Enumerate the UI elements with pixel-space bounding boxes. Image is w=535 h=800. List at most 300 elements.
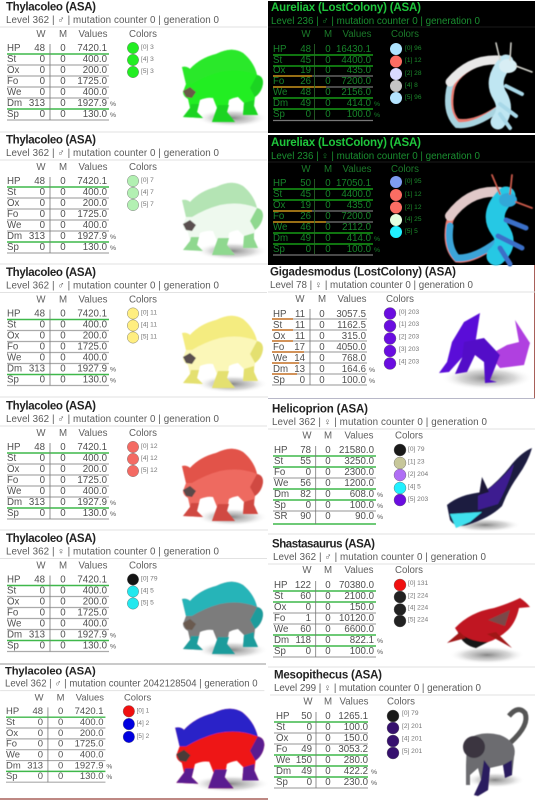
stat table: 0 [40,65,46,76]
color swatches [127,560,158,609]
stat table: 3057.5 [336,309,366,320]
stat table: 0 [60,308,66,320]
stat table: 0 [319,309,325,320]
stat table: 48 [300,87,311,98]
stat table: W [36,294,46,306]
stat table: 0 [60,54,66,65]
stat table: 1725.0 [77,76,108,87]
stat table: 0 [307,722,313,733]
stat table: 1927.9 [77,231,107,242]
stat table: 0 [60,486,66,497]
stat table: 0 [40,475,46,486]
stat table: 435.0 [347,200,372,211]
stat table: 0 [325,178,331,189]
stat table: 0 [300,375,306,386]
panel: Helicoprion [268,404,535,532]
stat table: Values [343,29,372,40]
stat table: 1725.0 [77,209,108,220]
stat table: 19 [300,200,311,211]
stat table: 0 [325,591,331,602]
panel: Thylacoleo red [0,401,268,526]
stat table: 0 [40,508,46,519]
stat table: HP [7,442,20,453]
stat table: We [7,87,21,98]
stat table: 0 [325,200,331,211]
stat table: 0 [40,242,46,253]
creature: teal thylacoleo [182,582,268,659]
stat table: % [371,769,377,776]
stat table: Dm [7,98,22,109]
stat table: M [59,294,67,306]
stat table: 13 [294,364,305,375]
color swatches: Colors [386,294,414,305]
title: Helicoprion (ASA) [272,404,368,416]
color swatches [390,29,422,104]
stat table: 1927.9 [77,630,107,640]
color swatches: Colors [395,565,423,576]
creature: Mesopithecus [463,710,526,796]
stat table: 50 [301,711,313,722]
panel: Mesopithecus [270,670,535,796]
stat table: 49 [300,98,311,109]
color swatches: [4] 201 [402,736,422,742]
creature: Shastasaurus [447,598,530,664]
stat table: % [110,632,116,640]
stat table: 0 [325,766,331,777]
stat table: 60 [300,591,312,602]
stat table: Sp [273,375,285,386]
color swatches [387,696,422,759]
stat table: 0 [60,453,66,464]
stat table: We [7,618,21,630]
stat table: Sp [276,777,288,788]
stat table: St [274,456,283,467]
stat table: Ox [7,330,20,342]
stat table: 400.0 [83,187,108,198]
stat table: % [110,234,116,241]
stat table: Fo [7,209,18,220]
stat table: 130.0 [80,771,104,782]
stat table: 200.0 [83,65,108,76]
stat table: 0 [325,580,331,591]
stat table: 0 [40,198,46,209]
color swatches: [0] 79 [402,710,419,717]
stat table: 150.0 [350,602,375,613]
stat table: M [324,696,332,708]
stat table: 0 [58,717,63,728]
stat table: Dm [274,635,289,646]
stat table: 2300.0 [344,467,375,478]
stat table: W [36,29,46,40]
color swatches: [3] 203 [399,346,419,353]
stat table: 0 [58,739,63,750]
creature: Gigadesmodus [439,313,533,390]
stat table: 4050.0 [336,342,367,353]
color swatches: [4] 11 [141,322,157,328]
stat table: 4400.0 [341,189,372,200]
stat table: W [301,164,311,175]
stat table: 0 [40,464,46,475]
stat table: 0 [306,646,312,657]
stat table: We [7,486,21,497]
stat table: 0 [40,453,46,464]
stat table: Dm [273,364,288,375]
color swatches: [2] 12 [405,204,422,211]
title: Gigadesmodus (LostColony) (ASA) [270,266,456,278]
stat table: 130.0 [83,640,108,652]
stat table: 2156.0 [341,87,372,98]
color swatches: [1] 23 [408,458,425,466]
panel: Aureliax dark female [268,135,535,265]
stat table: M [59,560,67,572]
color swatches: [0] 95 [405,178,422,185]
stat table: 0 [325,777,331,788]
stat table: % [110,378,116,384]
stat table: 0 [60,242,66,253]
stat table: St [7,187,16,198]
stat table: Values [79,294,108,306]
creature: blue Aureliax dragon [448,175,532,264]
stat table: Dm [7,497,22,508]
stat table: We [273,353,287,364]
stat table: 0 [40,87,46,98]
stat table: 0 [325,445,331,456]
stat table: Ox [273,331,286,342]
stat table: 0 [325,478,331,489]
color swatches [127,29,157,78]
stat table: 0 [325,109,331,120]
stat table: We [276,755,290,766]
color swatches [127,162,157,211]
stat table: St [7,453,16,464]
stat table: Fo [6,739,17,750]
stat table: 0 [306,109,312,120]
stat table: 400.0 [83,320,108,330]
stat table: M [324,430,332,442]
stat table: HP [6,706,19,717]
stat table: 0 [40,640,46,652]
stat table: % [377,492,383,499]
panel: Thylacoleo red and blue [0,665,270,793]
stat table: 0 [60,508,66,519]
stat table: 45 [300,189,311,200]
color swatches: [0] 7 [141,177,154,184]
stat table: 0 [325,613,331,624]
title: Thylacoleo (ASA) [5,665,96,678]
stat table: 0 [60,320,66,330]
stat table: 150 [296,755,313,766]
stat table: W [302,565,312,576]
stat table: M [318,294,326,305]
stat table: 11 [295,331,305,342]
stat table: 2112.0 [342,222,372,233]
stat table: 0 [60,65,66,76]
stat table: 130.0 [83,374,108,386]
color swatches: [5] 96 [405,94,422,101]
stat table: HP [274,445,287,456]
stat table: % [110,500,116,507]
stat table: SR [274,511,287,522]
stat table: Fo [7,342,18,352]
stat table: 0 [60,586,66,596]
stat table: W [36,428,46,439]
stat table: % [374,101,380,108]
stat table: 0 [319,342,325,353]
stat table: 200.0 [80,728,104,739]
stat table: Ox [6,728,18,739]
stat table: HP [273,178,286,189]
stat table [273,430,383,524]
stat table: HP [7,176,20,187]
stat table: 0 [40,54,46,65]
stat table: 49 [300,233,311,244]
panel: Shastasaurus [268,539,535,664]
stat table: St [7,320,16,330]
color swatches: [2] 204 [408,471,428,478]
stat table: 0 [40,486,46,497]
stat table: We [6,750,20,761]
stat table: 0 [306,467,312,478]
stat table: HP [273,44,286,55]
stat table: St [273,189,282,200]
color swatches: [2] 28 [405,70,422,77]
stat table: Fo [273,76,284,87]
stat table: HP [7,574,20,586]
stat table: St [273,320,282,331]
stat table: 130.0 [83,242,108,253]
color swatches [384,294,419,370]
stat table: % [377,503,383,510]
stat table: 0 [319,331,325,342]
stat table: 19 [300,65,311,76]
stat table: 118 [296,635,311,646]
stat table: % [106,774,112,781]
stat table: 14 [294,353,306,364]
stat table: HP [7,308,20,320]
stat table: 414.0 [347,233,372,244]
stat table [7,294,116,386]
subtitle: Level 362 | ♂ | mutation counter 0 | generation 0 [273,552,487,563]
stat table: 56 [300,478,311,489]
stat table: Fo [274,467,285,478]
stat table: Dm [6,760,21,771]
creature: green thylacoleo [182,50,268,127]
stat table: Ox [273,65,286,76]
stat table: 50 [300,178,312,189]
stat table: 0 [325,87,331,98]
subtitle: Level 362 | ♂ | mutation counter 0 | generation 0 [6,15,220,26]
subtitle: Level 236 | ♀ | mutation counter 0 | generation 0 [271,151,481,162]
stat table: Sp [274,646,286,657]
stat table: 1725.0 [75,739,104,750]
stat table: 200.0 [83,596,108,608]
stat table: % [374,112,380,119]
stat table: 48 [34,308,45,320]
color swatches: [5] 224 [408,616,428,624]
stat table: % [110,112,116,119]
subtitle: Level 362 | ♂ | mutation counter 0 | generation 0 [6,414,220,425]
stat table: 0 [325,222,331,233]
stat table [7,29,116,120]
subtitle: Level 362 | ♂ | mutation counter 2042128504 | generation 0 [5,679,258,690]
stat table: 0 [60,209,66,220]
stat table: Sp [6,771,18,782]
stat table: 400.0 [83,54,108,65]
stat table: 21580.0 [339,445,375,456]
title: Thylacoleo (ASA) [6,401,96,413]
stat table: 0 [325,744,331,755]
stat table: 7200.0 [341,76,372,87]
stat table: 400.0 [83,618,108,630]
stat table: 313 [29,497,45,508]
stat table: Values [340,696,369,708]
stat table: Fo [274,613,285,624]
stat table: W [303,696,313,708]
stat table: % [374,236,380,243]
creature: red thylacoleo [182,449,268,526]
stat table: 7420.1 [77,43,107,54]
stat table: M [324,164,332,175]
color swatches: [5] 201 [402,748,422,755]
color swatches: Colors [395,430,423,442]
color swatches [394,565,428,627]
stat table: 100.0 [347,109,372,120]
stat table: 49 [301,766,312,777]
stat table: Fo [7,76,18,87]
stat table: 0 [38,717,43,728]
subtitle: Level 362 | ♂ | mutation counter 0 | generation 0 [6,148,220,159]
stat table: 0 [40,596,46,608]
stat table: St [274,591,283,602]
subtitle: Level 362 | ♀ | mutation counter 0 | generation 0 [6,546,220,558]
stat table: 0 [60,497,66,508]
subtitle: Level 78 | ♀ | mutation counter 0 | generation 0 [270,280,474,291]
stat table: HP [274,580,287,591]
stat table: 0 [60,596,66,608]
stat table: 48 [34,574,45,586]
stat table [6,692,112,782]
stat table: 0 [325,211,331,222]
color swatches [390,164,422,238]
stat table: 0 [325,467,331,478]
stat table: 1 [306,613,311,624]
stat table: 0 [60,574,66,586]
stat table: 0 [325,65,331,76]
stat table: % [110,245,116,252]
stat table [274,696,377,788]
stat table: % [377,649,383,656]
title: Aureliax (LostColony) (ASA) [271,137,421,149]
stat table: 0 [58,771,63,782]
stat table: 0 [325,733,331,744]
color swatches: [5] 7 [141,201,154,208]
stat table: 0 [319,320,325,331]
stat table: 0 [325,233,331,244]
stat table: 1927.9 [77,98,107,109]
stat table: 1725.0 [77,475,108,486]
stat table: Sp [7,109,19,120]
stat table: 26 [300,211,311,222]
stat table: 11 [295,309,305,320]
stat table: % [110,366,116,374]
color swatches: [5] 5 [405,228,418,235]
stat table: 0 [306,602,312,613]
stat table: Ox [7,464,20,475]
stat table: 0 [40,342,46,352]
stat table: 1725.0 [77,608,108,618]
stat table: We [274,478,288,489]
stat table: 414.0 [347,98,372,109]
subtitle: Level 362 | ♂ | mutation counter 0 | generation 0 [6,280,220,292]
panel: Gigadesmodus [268,265,535,398]
stat table: 0 [40,608,46,618]
color swatches: Colors [124,692,152,703]
stat table: 122 [295,580,311,591]
stat table: Values [79,162,108,173]
stat table: 0 [60,630,66,640]
stat table: 17 [294,342,305,353]
title: Thylacoleo (ASA) [6,135,96,147]
color swatches [127,428,158,477]
stat table: 0 [319,353,325,364]
panel: Aureliax dark male [268,1,535,133]
stat table: 100.0 [350,500,375,511]
color swatches: [0] 79 [141,576,158,582]
color swatches: Colors [387,696,415,708]
stat table: 0 [307,777,313,788]
stat table: 49 [301,744,312,755]
stat table: % [369,378,375,385]
stat table: 400.0 [83,352,108,364]
stat table: 0 [325,189,331,200]
stat table [273,565,383,657]
stat table: 10120.0 [339,613,375,624]
stat table: Ox [7,198,20,209]
stat table: 70380.0 [339,580,375,591]
stat table: Values [345,430,374,442]
stat table: 130.0 [83,508,108,519]
stat table: Ox [7,65,20,76]
stat table: 0 [60,475,66,486]
color swatches: [4] 12 [141,455,158,462]
stat table: 0 [40,209,46,220]
stat table: 0 [40,374,46,386]
subtitle: Level 236 | ♂ | mutation counter 0 | generation 0 [271,16,481,27]
stat table: 0 [60,231,66,242]
stat table: 0 [325,489,331,500]
stat table: Fo [7,475,18,486]
color swatches: [4] 5 [141,588,154,594]
stat table: 0 [325,98,331,109]
stat table: 822.1 [350,635,374,646]
stat table: 313 [27,760,43,771]
stat table: 0 [325,635,331,646]
stat table: 400.0 [83,486,108,497]
color swatches: [4] 5 [408,484,421,490]
stat table: 0 [319,375,325,386]
stat table: 1927.9 [75,760,104,771]
stat table: 400.0 [83,453,108,464]
color swatches: Colors [129,294,157,306]
stat table: 0 [40,618,46,630]
stat table: 0 [38,750,43,761]
stat table: W [35,692,44,703]
stat table: 16430.1 [336,44,371,55]
stat table: 0 [60,330,66,342]
stat table: 0 [58,706,63,717]
stat table: 1725.0 [77,342,108,352]
stat table [272,294,375,386]
